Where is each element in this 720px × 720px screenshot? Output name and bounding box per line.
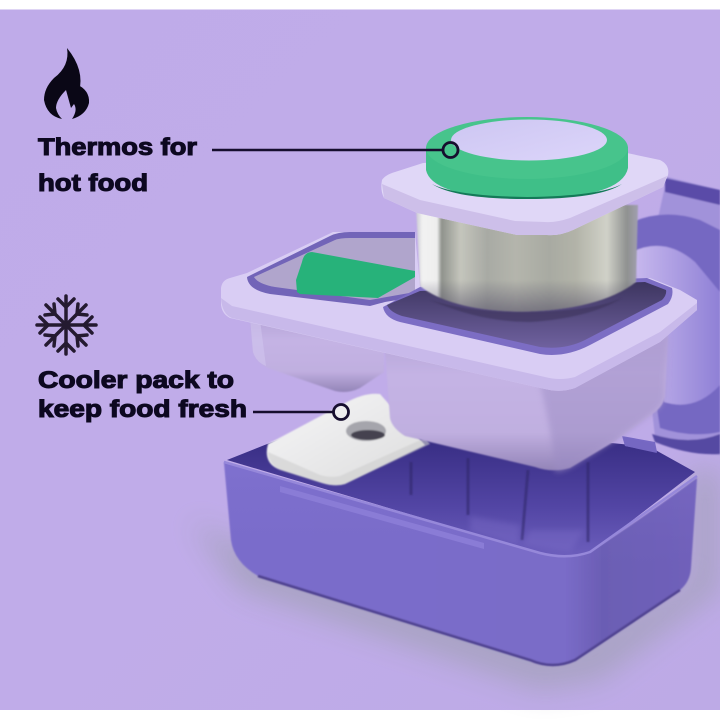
thermos	[381, 117, 668, 322]
heading: thermos callout text: Thermos for	[38, 134, 197, 161]
box interior	[227, 415, 695, 558]
lower lunch box base	[224, 415, 697, 665]
icon: flame	[44, 48, 89, 119]
right compartment body	[385, 335, 668, 470]
lid behind box	[632, 177, 720, 455]
box rim highlight	[224, 462, 697, 556]
heading: thermos callout text: hot food	[38, 170, 148, 197]
cooler pack	[267, 394, 430, 485]
green lid	[426, 147, 628, 199]
callout: thermos leader line	[212, 142, 458, 158]
heading: cooler callout text: Cooler pack to	[38, 367, 234, 394]
right compartment well	[383, 278, 672, 355]
lid inner disc	[451, 120, 607, 160]
heading: thermos callout text	[38, 134, 197, 197]
callout: cooler leader line	[253, 404, 348, 420]
box hinge	[622, 436, 657, 452]
plate flange	[381, 153, 668, 235]
left compartment well	[247, 232, 415, 306]
heading: cooler callout text	[38, 367, 247, 423]
steel cup	[416, 205, 638, 312]
icon: snowflake	[37, 296, 96, 354]
hinge detail	[623, 437, 657, 453]
soft floor shadow	[190, 470, 720, 690]
box outer wall	[224, 462, 697, 665]
left compartment body	[250, 318, 384, 392]
heading: cooler callout text: keep food fresh	[38, 396, 247, 423]
food tray	[221, 232, 697, 472]
cooler pack hole	[346, 421, 386, 441]
tray rim	[221, 232, 697, 391]
green divider	[296, 252, 415, 298]
